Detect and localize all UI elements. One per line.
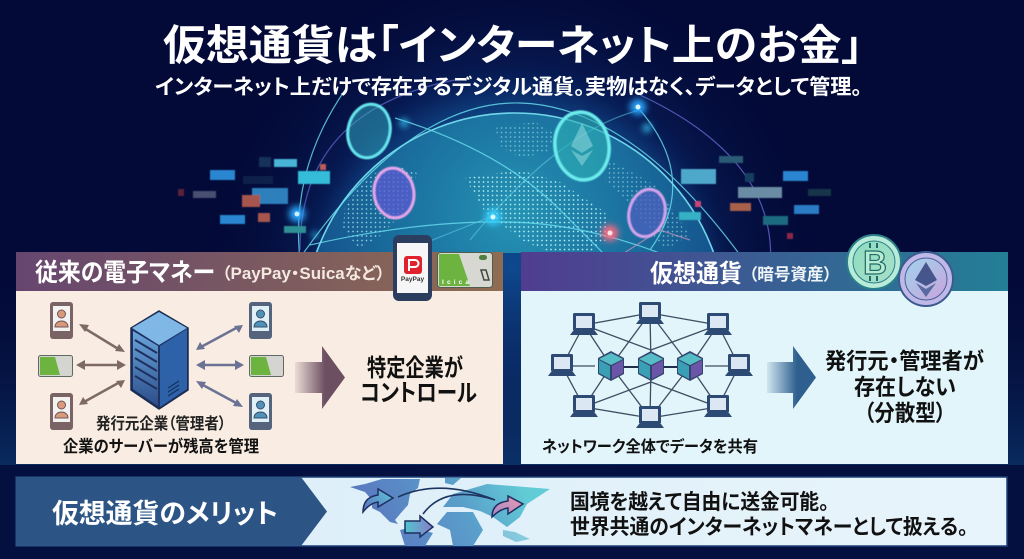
- panel header: traditional e-money: [16, 252, 503, 291]
- conclusion text: コントロール: [360, 380, 477, 407]
- globe with network: [284, 79, 772, 253]
- arrows: right connections: [196, 325, 244, 407]
- icon: PayPay phone: PayPay: [401, 276, 424, 283]
- panel: crypto: [521, 235, 1008, 464]
- panel: traditional e-money: [16, 235, 503, 464]
- icon: block: [638, 351, 664, 381]
- network caption: ネットワーク全体でデータを共有: [542, 437, 758, 456]
- panel header: crypto: 仮想通貨: [650, 260, 742, 288]
- panel header: traditional e-money: 従来の電子マネー: [35, 259, 215, 287]
- icon: ethereum coin: [899, 252, 953, 306]
- icon: server: [131, 311, 188, 409]
- conclusion text: 特定企業が: [367, 354, 463, 382]
- coin: teal left: [343, 100, 395, 162]
- coin: ethereum glass: [551, 109, 613, 183]
- floating data cards right: [679, 156, 831, 239]
- floating data cards left: [178, 157, 330, 233]
- arrows: left connections: [76, 324, 126, 405]
- icon: block: [598, 351, 624, 381]
- network: central server with devices: [38, 302, 284, 430]
- icon: laptop: [704, 313, 732, 335]
- icon: Suica card: [438, 252, 492, 288]
- icon: phone right top: [249, 302, 272, 339]
- banner label: [16, 477, 327, 546]
- network arcs: [298, 79, 772, 252]
- icon: phone right bottom: [249, 393, 272, 430]
- subtitle: インターネット上だけで存在するデジタル通貨。実物はなく、データとして管理。: [155, 75, 862, 99]
- benefit text: 世界共通のインターネットマネーとして扱える。: [570, 516, 968, 539]
- icon: laptop: [725, 354, 753, 376]
- icon: laptop: [570, 395, 598, 417]
- panel header: crypto: [521, 252, 1008, 291]
- icon: block: [677, 351, 703, 381]
- icon: phone left bottom: [50, 393, 73, 430]
- icon: bitcoin coin: B: [863, 244, 887, 281]
- icon: Suica card: Icica: [442, 279, 469, 286]
- arrow: pink: [492, 496, 523, 517]
- icon: card right: [250, 356, 284, 376]
- coin: pink right: [624, 185, 670, 241]
- flight arcs: [398, 488, 495, 514]
- icon: laptop: [570, 313, 598, 335]
- panel header: traditional e-money: （PayPay・Suicaなど）: [222, 264, 385, 283]
- icon: laptop: [636, 302, 664, 324]
- world map with arrows: [350, 478, 550, 546]
- icon: laptop: [636, 406, 664, 428]
- conclusion text: 存在しない: [854, 375, 956, 400]
- coin: pink left: [371, 165, 417, 221]
- dotted continents: [343, 122, 690, 252]
- server caption: 発行元企業（管理者）: [96, 414, 226, 433]
- icon: PayPay phone: [393, 235, 432, 301]
- icon: card left: [38, 356, 72, 376]
- icon: phone left top: [50, 302, 73, 339]
- conclusion text: [360, 354, 477, 407]
- conclusion text: 発行元・管理者が: [825, 348, 985, 374]
- icon: laptop: [548, 354, 576, 376]
- icon: bitcoin coin: [847, 235, 901, 289]
- panel header: crypto: （暗号資産）: [749, 265, 832, 284]
- network: peer to peer: [548, 302, 753, 428]
- server caption: 企業のサーバーが残高を管理: [63, 436, 259, 456]
- arrow: blue: [363, 489, 393, 512]
- server caption: [63, 414, 259, 456]
- benefit text: [570, 491, 968, 539]
- icon: laptop: [704, 395, 732, 417]
- arrow: to conclusion: [767, 346, 816, 409]
- panel: merit banner: [16, 477, 1007, 546]
- conclusion text: [825, 348, 985, 426]
- glowing nodes: [289, 99, 651, 241]
- continents: [350, 478, 550, 546]
- conclusion text: （分散型）: [864, 401, 946, 426]
- benefit text: 国境を越えて自由に送金可能。: [570, 491, 829, 514]
- banner label: 仮想通貨のメリット: [52, 499, 278, 529]
- title: 仮想通貨は「インターネット上のお金」: [163, 22, 863, 69]
- arrow: to conclusion: [295, 346, 345, 409]
- arrow: teal: [405, 516, 433, 537]
